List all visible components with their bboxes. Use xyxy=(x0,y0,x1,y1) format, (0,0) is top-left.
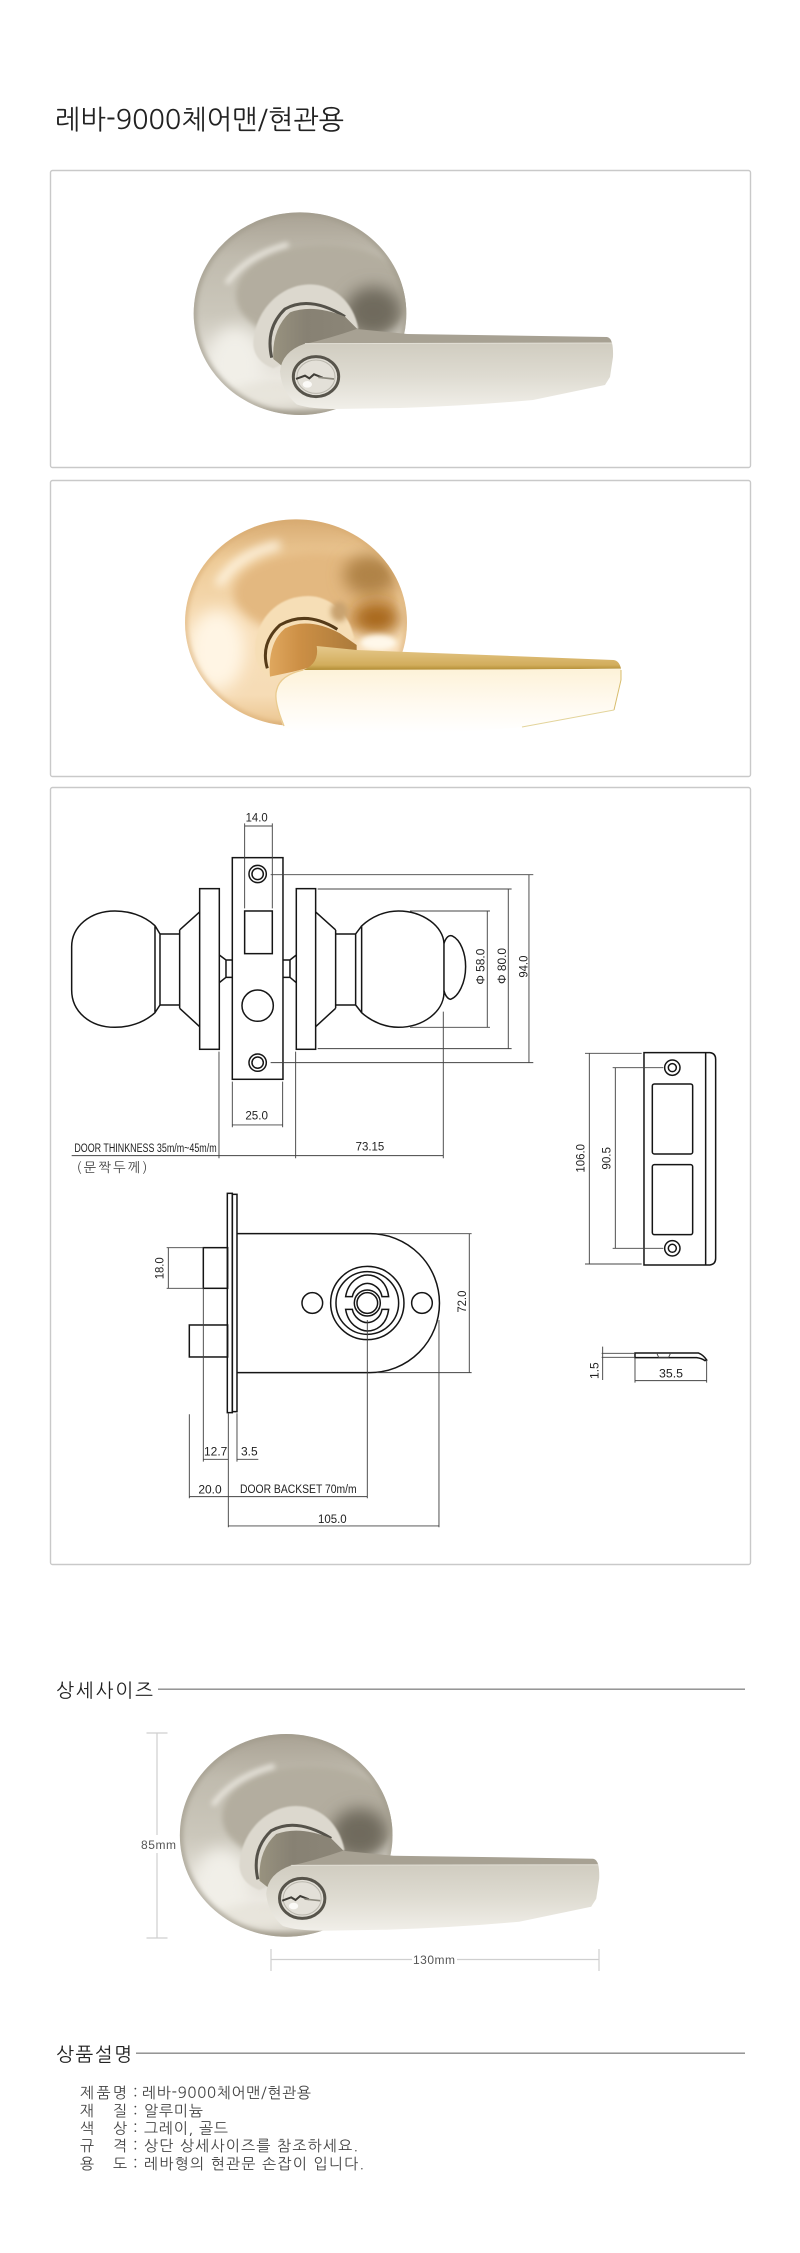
dimension labels xyxy=(74,810,531,1174)
dimension labels: 1.5 xyxy=(587,1362,601,1379)
chart: front view knob drawing with dimensions xyxy=(72,810,533,1174)
icon: silver lever handle with size annotations xyxy=(140,1733,599,1971)
text block: product specifications: 질 xyxy=(113,2103,127,2119)
chart: strike plate drawing with dimensions xyxy=(573,1053,716,1383)
width dimension 130mm xyxy=(271,1949,599,1971)
dimension labels: Φ 80.0 xyxy=(495,948,509,984)
height dimension 85mm xyxy=(140,1733,177,1938)
dimension labels: 18.0 xyxy=(153,1257,167,1279)
text block: product specifications: 상 xyxy=(113,2120,128,2136)
text block: product specifications xyxy=(80,2085,364,2172)
text block: product specifications: 색 xyxy=(80,2120,94,2136)
icon: gold lever handle xyxy=(185,519,621,733)
dimension labels: 106.0 xyxy=(573,1144,587,1173)
dimension labels: 14.0 xyxy=(246,810,268,824)
text block: product specifications: 도 xyxy=(113,2157,127,2172)
text block: product specifications: 용 xyxy=(80,2156,94,2172)
dimension labels xyxy=(153,1257,469,1526)
text block: product specifications: : xyxy=(133,2104,138,2119)
text block: product specifications: 상단 상세사이즈를 참조하세요. xyxy=(144,2138,358,2154)
dimension labels: 35.5 xyxy=(659,1366,683,1380)
text block: product specifications: 알루미늄 xyxy=(144,2103,203,2119)
dimension labels: 94.0 xyxy=(517,956,531,978)
title: 레바-9000체어맨/현관용 xyxy=(55,106,344,133)
icon: silver lever handle xyxy=(194,212,613,415)
text block: product specifications: 제품명 xyxy=(80,2085,127,2101)
text block: product specifications: : xyxy=(133,2157,138,2172)
dimension labels: DOOR BACKSET 70m/m xyxy=(240,1482,357,1496)
panel: technical drawings xyxy=(50,788,750,1564)
dimension labels: 72.0 xyxy=(455,1291,469,1313)
text block: product specifications: : xyxy=(133,2086,138,2101)
text block: product specifications: 재 xyxy=(80,2103,94,2119)
dimension labels: 73.15 xyxy=(356,1139,384,1153)
text block: product specifications: 격 xyxy=(113,2138,127,2154)
dimension labels xyxy=(573,1144,683,1380)
dimension labels: 25.0 xyxy=(245,1108,268,1122)
text block: product specifications: : xyxy=(133,2122,138,2136)
dimension labels: DOOR THINKNESS 35m/m~45m/m xyxy=(74,1141,217,1155)
dimension labels: 90.5 xyxy=(599,1147,613,1170)
chart: mortise lock side drawing with dimensions xyxy=(153,1193,472,1527)
text block: product specifications: : xyxy=(133,2139,138,2154)
heading: product description: 상품설명 xyxy=(56,2045,132,2064)
dimension labels: 12.7 xyxy=(204,1444,227,1458)
heading: detailed size: 상세사이즈 xyxy=(56,1681,153,1700)
dimension labels: 105.0 xyxy=(318,1512,347,1526)
panel: gold lever photo xyxy=(50,480,750,776)
height dimension 85mm: 85mm xyxy=(141,1838,176,1852)
text block: product specifications: 규 xyxy=(80,2139,94,2154)
dimension labels: (문짝두께) xyxy=(77,1160,147,1174)
dimension labels: 3.5 xyxy=(241,1444,258,1458)
dimension labels: 20.0 xyxy=(198,1482,222,1496)
text block: product specifications: 레바형의 현관문 손잡이 입니다. xyxy=(144,2156,364,2172)
text block: product specifications: 레바-9000체어맨/현관용 xyxy=(142,2085,311,2101)
dimension labels: Φ 58.0 xyxy=(474,949,488,985)
panel: silver lever photo xyxy=(50,170,750,468)
text block: product specifications: 그레이, 골드 xyxy=(144,2120,228,2136)
width dimension 130mm: 130mm xyxy=(413,1953,455,1967)
